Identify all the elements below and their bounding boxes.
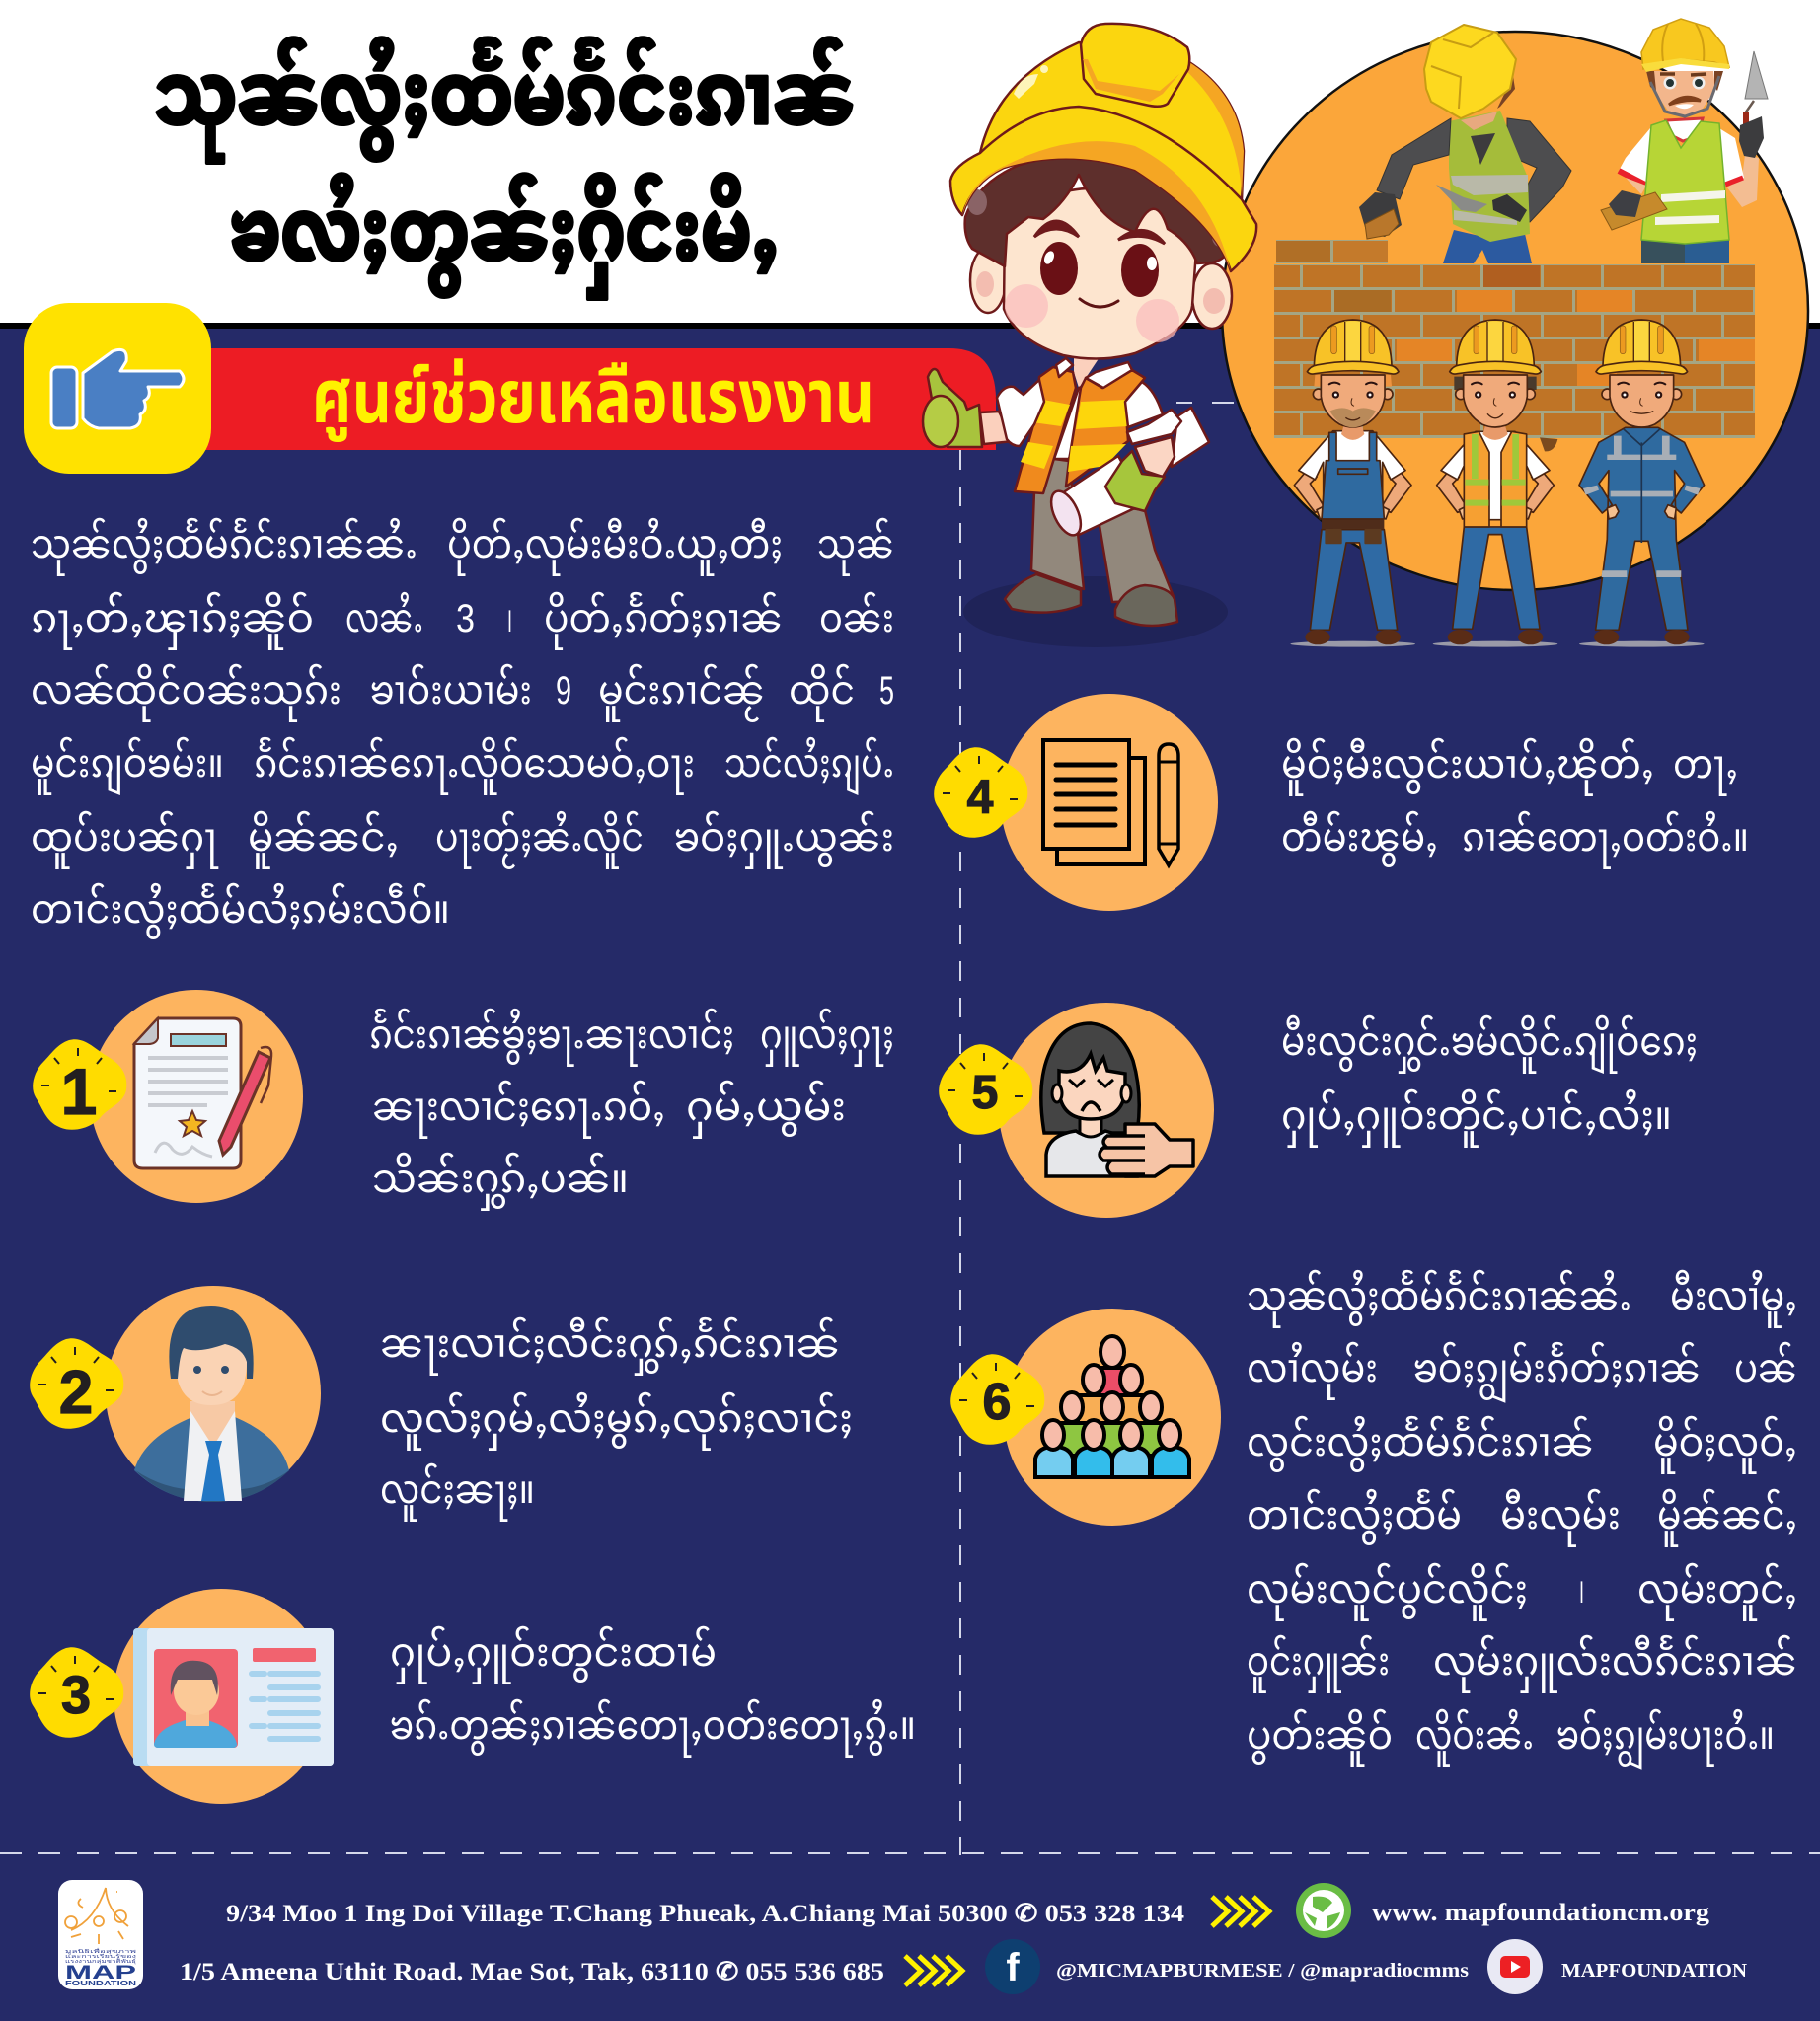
step 3 text xyxy=(390,1625,916,1758)
step 1 text: ႁူလ်ႈႁႃႈ xyxy=(760,1008,894,1067)
intro paragraph: မူင်းၵၢင်ၼႂ် xyxy=(598,663,765,722)
illustration: worker in blue coverall xyxy=(1579,320,1705,647)
step 2 text: လူင်ႈၼႃႈ။ xyxy=(380,1462,535,1522)
mascot right cuff xyxy=(1127,410,1181,444)
intro paragraph: ၵႃႇတ်ႇၾၢၵ်ႈၼိူဝ် xyxy=(31,591,314,650)
mascot left leg xyxy=(1031,459,1084,589)
step 1 text: ၼႃးလၢင်ႈၵေႃႉၵဝ်ႇ xyxy=(372,1080,665,1139)
step 1 text: သိၼ်းႁွၵ်ႇပၼ်။ xyxy=(372,1152,629,1211)
footer logo: MAP Foundation: FOUNDATION xyxy=(65,1981,136,1987)
footer logo: MAP Foundation: และการเรียนรู้ของ xyxy=(65,1953,137,1960)
intro paragraph: 3 xyxy=(456,597,475,640)
footer logo: MAP Foundation: MAP xyxy=(65,1963,137,1984)
intro paragraph: ၊ xyxy=(507,597,512,640)
mascot hat crown xyxy=(1081,24,1189,107)
step 2 circle and person icon xyxy=(106,1286,321,1502)
mascot thumbs-up glove xyxy=(928,369,982,447)
icon: facebook: f xyxy=(1006,1946,1020,1989)
mascot collar xyxy=(1056,358,1132,388)
mascot right shoe xyxy=(1115,585,1177,626)
step 4 text: ၵၢၼ်တေႃႇဝတ်းဝႆႉ။ xyxy=(1462,810,1749,869)
step 4 badge xyxy=(934,747,1027,838)
step 4 text: မိူဝ်ႈမီးလွင်းယၢပ်ႇၽိုတ်ႇ xyxy=(1281,737,1654,796)
step 2 text xyxy=(380,1316,853,1522)
horizontal dashed divider xyxy=(0,1852,1820,1854)
step 6 circle and crowd icon xyxy=(1004,1309,1221,1526)
footer social handles: @MICMAPBURMESE / @mapradiocmms xyxy=(1056,1960,1469,1982)
intro paragraph: လၼ်ထိုင်ဝၼ်းသုၵ်း xyxy=(31,663,341,722)
step 1 circle and contract icon xyxy=(90,990,303,1203)
footer logo: MAP Foundation xyxy=(58,1880,143,1989)
intro paragraph: ၶၢဝ်းယၢမ်း xyxy=(370,663,532,712)
mascot right leg xyxy=(1099,506,1175,602)
intro paragraph: ထူပ်းပၼ်ႁႃ xyxy=(31,810,218,869)
step 4 text: တီမ်းၽွမ်ႇ xyxy=(1281,810,1438,867)
step 3 circle and ID card icon xyxy=(114,1589,334,1804)
mascot left sleeve xyxy=(997,380,1044,446)
mascot right sleeve xyxy=(1125,382,1163,427)
step 5 badge: 5 xyxy=(972,1067,998,1119)
step 1 text xyxy=(369,1008,894,1211)
vertical dashed divider xyxy=(959,450,961,1855)
intro paragraph: သုၼ်လွႆႈထႅမ်ၵႅင်းၵၢၼ်ၼႆႉ xyxy=(31,517,417,576)
footer logo: MAP Foundation: แรงงานกลุ่มชาติพันธุ์ xyxy=(65,1958,136,1965)
step 6 text: မိူၼ်ၼင်ႇ xyxy=(1657,1488,1797,1547)
mascot right vest panel xyxy=(1066,370,1145,487)
illustration: mascot boy with hard hat xyxy=(923,24,1256,647)
intro paragraph: ၶဝ်ႈႁူႉယွၼ်း xyxy=(674,810,894,869)
footer website: www. mapfoundationcm.org xyxy=(1372,1900,1710,1926)
step 4 circle and documents icon xyxy=(1001,694,1218,911)
red banner with Thai heading xyxy=(188,348,996,450)
step 6 text: ၊ xyxy=(1579,1568,1584,1611)
icon: youtube xyxy=(1487,1939,1543,1994)
step 6 text: လုမ်းတူင်ႇ xyxy=(1637,1562,1797,1621)
step 4 text xyxy=(1281,737,1749,869)
step 2 text: ၼႃးလၢင်ႈလီင်းႁွၵ်ႇၵႅင်းၵၢၼ် xyxy=(380,1316,840,1376)
intro paragraph: မူင်းၵျဝ်ၶမ်း။ xyxy=(31,736,224,795)
step 6 text: ပၼ် xyxy=(1734,1341,1797,1390)
intro paragraph: တၢင်းလွႆႈထႅမ်လႆႈၵမ်းလဵဝ်။ xyxy=(31,882,450,939)
step 6 badge xyxy=(950,1354,1044,1445)
mascot right forearm xyxy=(1135,437,1175,477)
intro paragraph: ပႃးတႂ်ႈၼႆႉလိူင် xyxy=(435,810,644,869)
mascot face xyxy=(1004,188,1197,359)
icon: chevrons to facebook xyxy=(905,1956,962,1985)
mascot left forearm xyxy=(980,412,1014,444)
mascot shirt xyxy=(1054,385,1091,459)
intro paragraph: သင်လႆႈၵျပ်ႉ xyxy=(724,736,894,795)
step 1 badge xyxy=(33,1039,126,1130)
title: ၶလႆႈတွၼ်ႈႁိင်းမိႇ xyxy=(230,173,781,299)
illustration: worker in overalls xyxy=(1290,320,1415,647)
step 6 text: တၢင်းလွႆႈထႅမ် xyxy=(1247,1488,1462,1545)
mascot hat brim shade xyxy=(962,141,1231,271)
footer address line 2: 1/5 Ameena Uthit Road. Mae Sot, Tak, 63110 ✆ 055 536 685 xyxy=(180,1959,884,1985)
step 6 text: မီးလၢႆမူႇ xyxy=(1670,1270,1797,1328)
mascot hat side shade xyxy=(1184,62,1244,197)
step 2 badge xyxy=(30,1338,123,1429)
red banner with Thai heading: ศูนย์ช่วยเหลือแรงงาน xyxy=(312,355,874,442)
title xyxy=(154,37,855,299)
step 6 text: ၶဝ်ႈၵျွမ်းပႃးဝႆႉ။ xyxy=(1556,1708,1775,1770)
mascot left vest strip xyxy=(1015,367,1076,493)
intro paragraph: 9 xyxy=(556,669,571,712)
illustration: worker in safety vest xyxy=(1433,320,1557,647)
step 6 text: မီးလုမ်း xyxy=(1500,1488,1621,1547)
step 6 text xyxy=(1247,1269,1797,1770)
step 6 text: ၶဝ်ႈၵျွမ်းၵႅတ်ႈၵၢၼ် xyxy=(1413,1341,1701,1403)
step 2 text: လူလ်ႈႁမ်ႇလႆႈမွၵ်ႇလုၵ်ႈလၢင်ႈ xyxy=(380,1391,853,1451)
header rule xyxy=(0,323,1820,329)
mascot blueprint roll xyxy=(1045,408,1209,540)
short dash near mascot xyxy=(1176,402,1234,404)
footer address line 1: 9/34 Moo 1 Ing Doi Village T.Chang Phueak, A.Chiang Mai 50300 ✆ 053 328 134 xyxy=(226,1901,1185,1927)
step 3 badge xyxy=(30,1647,123,1738)
intro paragraph: 5 xyxy=(879,669,894,712)
step 1 text: ၵႅင်းၵၢၼ်ၶွႆႈၶႃႉၼႃးလၢင်ႈ xyxy=(369,1008,734,1067)
step 3 text: ႁုပ်ႇႁူဝ်းတွင်းထၢမ် xyxy=(390,1625,717,1684)
footer logo: MAP Foundation: มูลนิธิเพื่อสุขภาพ xyxy=(65,1948,136,1955)
white header background xyxy=(0,0,1820,324)
illustration: top-right bricklayer with trowel xyxy=(1601,19,1768,263)
footer youtube name: MAPFOUNDATION xyxy=(1561,1960,1748,1982)
intro paragraph: ထိုင် xyxy=(789,663,855,722)
step 1 badge: 1 xyxy=(61,1055,97,1128)
step 3 badge: 3 xyxy=(61,1666,91,1725)
mascot hat ridge xyxy=(980,107,1242,199)
step 6 text: မိူဝ်ႈလူဝ်ႇ xyxy=(1653,1415,1797,1474)
intro paragraph: မိူၼ်ၼင်ႇ xyxy=(248,810,399,869)
step 4 badge: 4 xyxy=(967,772,994,824)
illustration: orange circle backdrop xyxy=(1222,32,1808,590)
step 5 text xyxy=(1281,1014,1698,1148)
step 6 text: လွင်းလွႆႈထႅမ်ၵႅင်းၵၢၼ် xyxy=(1247,1415,1594,1472)
icon: pointing hand on yellow tile xyxy=(24,303,211,474)
step 6 text: လုမ်းလူင်ပွင်လိူင်ႈ xyxy=(1247,1562,1528,1621)
mascot ears xyxy=(970,248,1006,313)
intro paragraph: လၼႆႉ xyxy=(345,592,423,640)
step 6 text: ပွတ်းၼိူဝ် xyxy=(1247,1708,1393,1767)
intro paragraph: ၵႅင်းၵၢၼ်ၵေႃႉလိူဝ်သေမဝ်ႇဝႃး xyxy=(254,736,695,795)
intro paragraph: ပိုတ်ႇလုမ်းမီးဝႆႉယူႇတီႈ xyxy=(447,517,783,576)
icon: facebook xyxy=(985,1939,1040,1994)
illustration: top-left bricklayer xyxy=(1359,25,1571,263)
mascot hard hat xyxy=(950,42,1256,271)
mascot left shoe xyxy=(1005,574,1081,613)
step 6 text: သုၼ်လွႆႈထႅမ်ၵႅင်းၵၢၼ်ၼႆႉ xyxy=(1247,1269,1631,1328)
step 3 text: ၶၵ်ႉတွၼ်ႈၵၢၼ်တေႃႇဝတ်းတေႃႇၵွႆႉ။ xyxy=(390,1698,916,1758)
step 5 text: ႁုပ်ႇႁူဝ်းတိူင်ႇပၢင်ႇလႆႈ။ xyxy=(1281,1088,1672,1148)
step 5 text: မီးလွင်းႁွင်ႉၶမ်လိူင်ႉၵျိုဝ်ၵေႈ xyxy=(1281,1014,1698,1074)
step 6 text: လိူဝ်းၼႆႉ xyxy=(1415,1708,1534,1767)
illustration: brick wall xyxy=(1274,240,1755,438)
intro paragraph: ဝၼ်း xyxy=(819,591,894,640)
mascot right glove xyxy=(1105,451,1165,511)
mascot hair xyxy=(965,156,1229,266)
icon: globe xyxy=(1296,1883,1351,1938)
mascot glove fist xyxy=(923,396,958,447)
step 6 text: လၢႆလုမ်း xyxy=(1247,1341,1378,1400)
intro paragraph: သုၼ် xyxy=(817,517,894,576)
icon: chevrons to website xyxy=(1212,1897,1269,1926)
step 4 text: တႃႇ xyxy=(1673,743,1738,796)
intro paragraph: ပိုတ်ႇၵႅတ်ႈၵၢၼ် xyxy=(544,591,783,650)
step 6 badge: 6 xyxy=(983,1374,1011,1431)
step 5 circle and woman icon xyxy=(999,1003,1214,1218)
step 2 badge: 2 xyxy=(59,1359,93,1427)
step 5 badge xyxy=(939,1044,1032,1135)
step 6 text: လုမ်းႁူလ်းလီၵႅင်းၵၢၼ် xyxy=(1433,1634,1797,1693)
title: သုၼ်လွႆႈထႅမ်ၵႅင်းၵၢၼ် xyxy=(154,37,855,163)
step 1 text: ႁမ်ႇယွမ်း xyxy=(686,1080,846,1139)
mascot neck xyxy=(1074,345,1107,388)
step 6 text: ဝူင်းႁူၼ်း xyxy=(1247,1634,1390,1693)
intro paragraph xyxy=(31,517,894,939)
